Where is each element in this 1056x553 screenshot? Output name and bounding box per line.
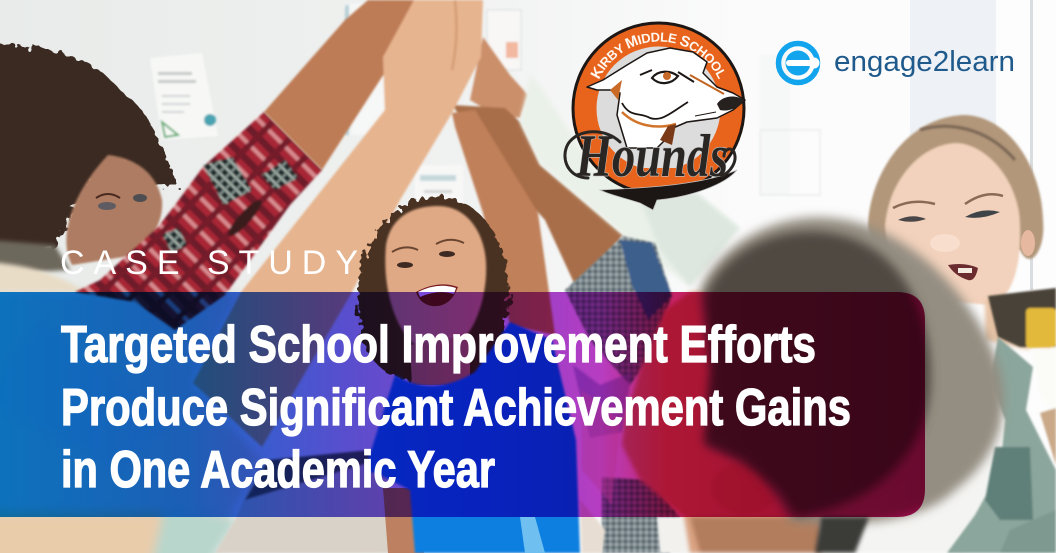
background objects, right edge [988, 288, 1056, 465]
logo wordmark swashes [565, 132, 735, 178]
right student: smiling girl [868, 115, 1043, 350]
label: case study: CASE STUDY [60, 244, 358, 282]
floor and table [215, 390, 620, 553]
white sleeve [520, 75, 740, 287]
logo badge: orange ring [573, 23, 744, 194]
raised arms and hands [193, 0, 623, 447]
title [61, 316, 851, 499]
logo orange band below dog [620, 168, 700, 186]
gradient title panel [0, 292, 925, 517]
left student: curly hair and face [0, 46, 178, 292]
white t-shirt [657, 420, 1005, 553]
logo: Kirby Middle School Hounds [563, 22, 746, 210]
foreground boy: face, ear, neck [622, 290, 821, 553]
centre student: laughing girl in blue shirt [358, 197, 580, 553]
wall posters [150, 0, 820, 235]
title line 2: Produce Significant Achievement Gains [61, 379, 851, 437]
wordmark: engage2learn [834, 46, 1015, 78]
large foreground shoulder, lower left [0, 292, 262, 553]
title line 3: in One Academic Year [61, 441, 495, 499]
logo inner circle [596, 46, 720, 170]
logo wordmark: Hounds: Hounds [575, 123, 728, 189]
foreground boy: blurred hair [700, 217, 1004, 553]
icon: engage2learn mark [778, 44, 820, 82]
red plaid sleeve [75, 112, 322, 330]
checked shirt sleeve [565, 236, 680, 553]
logo banner swoosh [600, 170, 737, 210]
icon: hound head [587, 48, 745, 148]
logo: engage2learn [778, 44, 1015, 82]
logo text: school name on arc: KIRBY MIDDLE SCHOOL [590, 32, 724, 80]
denim jacket [947, 337, 1056, 553]
title line 1: Targeted School Improvement Efforts [61, 316, 816, 374]
